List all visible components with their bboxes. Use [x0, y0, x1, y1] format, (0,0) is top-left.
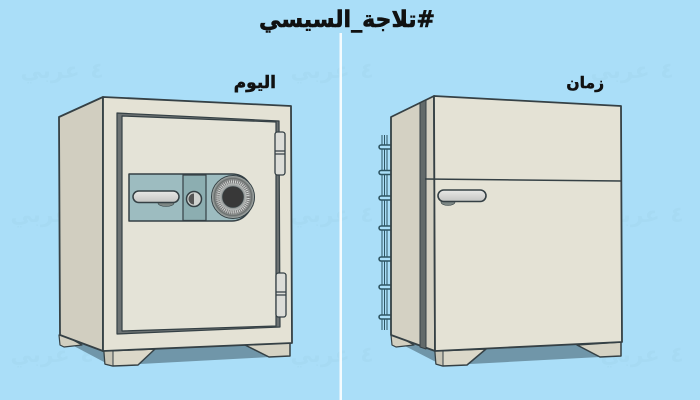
- watermarks: عربي: [20, 59, 80, 84]
- title: #تلاجة_السيسي: [259, 7, 435, 33]
- watermarks: عربي: [600, 203, 660, 228]
- watermarks: عربي: [290, 59, 350, 84]
- side panel: [59, 97, 103, 351]
- watermarks: ٤: [360, 203, 374, 228]
- watermarks: عربي: [590, 59, 650, 84]
- front body: [103, 97, 292, 351]
- door seam: [425, 179, 621, 181]
- front left foot: [435, 349, 486, 366]
- top hinge: [275, 132, 285, 175]
- keyhole: [186, 192, 202, 206]
- watermarks: ٤: [90, 59, 104, 84]
- watermarks: ٤: [670, 343, 684, 368]
- front left foot: [104, 349, 155, 366]
- right foot: [245, 342, 290, 357]
- lock panel: [129, 174, 254, 221]
- bottom hinge: [276, 273, 286, 317]
- watermarks: ٤: [660, 59, 674, 84]
- fridge handle: [438, 190, 486, 206]
- right foot: [577, 342, 621, 357]
- rear foot: [391, 335, 414, 347]
- watermarks: ٤: [80, 203, 94, 228]
- side panel: [391, 96, 435, 351]
- watermarks: عربي: [290, 203, 350, 228]
- watermarks: عربي: [600, 343, 660, 368]
- watermarks: ٤: [360, 59, 374, 84]
- label: past: زمان: [566, 74, 604, 92]
- watermarks: ٤: [80, 343, 94, 368]
- watermarks: [10, 59, 684, 368]
- watermarks: عربي: [10, 343, 70, 368]
- watermarks: عربي: [10, 203, 70, 228]
- safe handle: [133, 191, 179, 206]
- safe illustration: [59, 97, 292, 366]
- door frame: [117, 113, 280, 334]
- center divider: [340, 33, 342, 400]
- watermarks: ٤: [670, 203, 684, 228]
- condenser coils: [381, 135, 391, 330]
- watermarks: ٤: [360, 343, 374, 368]
- door: [122, 116, 276, 331]
- front body: [434, 96, 622, 351]
- combination dial: [212, 176, 254, 218]
- door edge strip: [420, 100, 426, 349]
- watermarks: عربي: [290, 343, 350, 368]
- floor shadow: [403, 340, 600, 364]
- label: today: اليوم: [234, 73, 276, 93]
- fridge illustration: [381, 96, 622, 366]
- rear foot: [59, 335, 82, 347]
- floor shadow: [72, 340, 270, 364]
